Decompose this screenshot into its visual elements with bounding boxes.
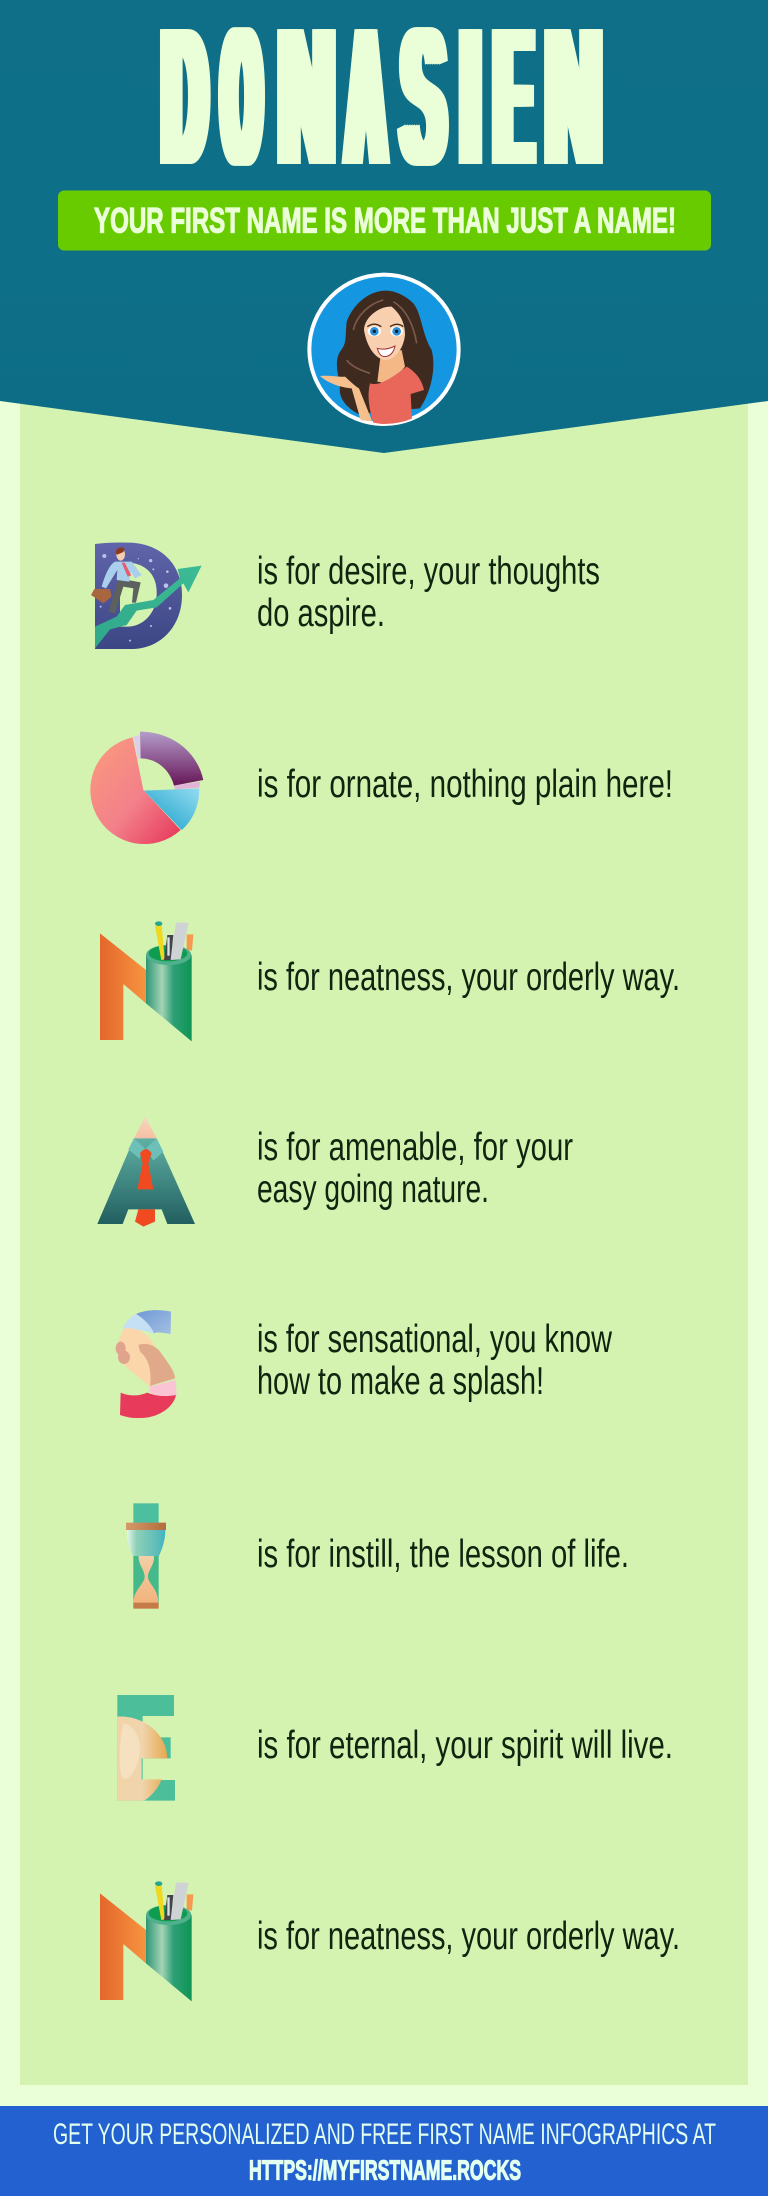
row: S xyxy=(115,1310,613,1418)
row: N xyxy=(100,921,680,1041)
row: N (last) xyxy=(100,1881,680,2001)
text: S line xyxy=(257,1318,613,1403)
subtitle banner xyxy=(58,190,711,250)
text: A line xyxy=(257,1126,573,1211)
content panel xyxy=(20,380,748,2085)
icon: letter A with necktie xyxy=(97,1117,195,1227)
icon: letter O pie chart xyxy=(90,732,203,844)
text: A line: is for amenable, for your xyxy=(257,1126,573,1169)
text: D line: is for desire, your thoughts xyxy=(257,550,600,593)
text: S line: is for sensational, you know xyxy=(257,1318,613,1361)
row: O xyxy=(90,732,673,844)
row: D xyxy=(91,542,600,649)
icon: letter N with pen holder xyxy=(100,921,193,1041)
icon: letter S with shaking hands xyxy=(115,1310,177,1418)
footer url: HTTPS://MYFIRSTNAME.ROCKS xyxy=(249,2154,521,2186)
text: A line: easy going nature. xyxy=(257,1168,489,1211)
icon: letter I hourglass xyxy=(126,1503,166,1609)
header chevron xyxy=(0,0,768,453)
row: A xyxy=(97,1117,573,1227)
icon: letter D with climbing businessman xyxy=(91,542,202,649)
text: D line: do aspire. xyxy=(257,592,385,635)
text: I line: is for instill, the lesson of life. xyxy=(257,1533,629,1576)
row: I xyxy=(126,1503,629,1609)
avatar: woman portrait xyxy=(309,275,459,424)
text: S line: how to make a splash! xyxy=(257,1360,544,1403)
icon: letter N with pen holder xyxy=(100,1881,193,2001)
footer xyxy=(0,2106,768,2196)
text: D line xyxy=(257,550,600,635)
row: E xyxy=(117,1695,673,1801)
title xyxy=(160,0,603,206)
icon: letter E with moon xyxy=(117,1695,175,1801)
